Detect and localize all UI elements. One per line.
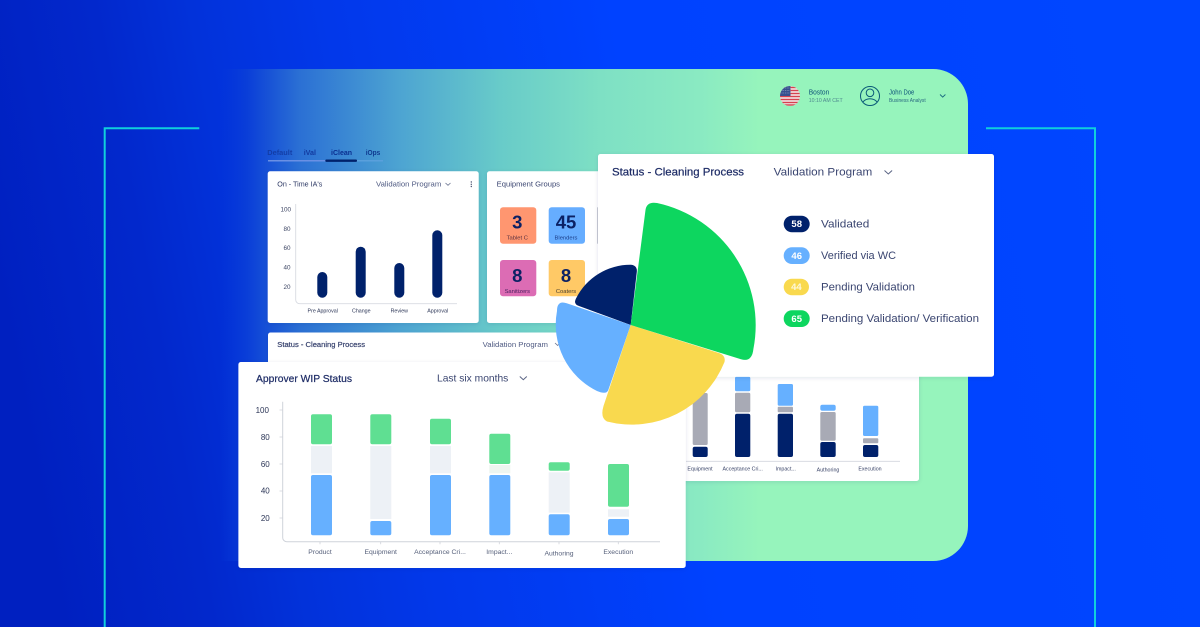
tabs: iClean — [331, 148, 352, 157]
legend: Verified via WC — [784, 247, 896, 264]
tabs: Default — [267, 148, 293, 157]
location text — [809, 89, 843, 104]
stacked bar chart: Product — [308, 549, 332, 556]
dropdown: Validation Program — [376, 179, 441, 188]
header: location and user — [780, 86, 945, 106]
bar chart: 40 — [283, 264, 291, 272]
frame accent: right corner — [986, 128, 1095, 627]
bar: Execution — [863, 406, 878, 457]
panel: Equipment Groups — [487, 171, 612, 323]
tile: Tablet C — [500, 207, 536, 244]
location text: Boston — [809, 89, 829, 96]
bar chart: Review — [391, 309, 408, 315]
legend: Pending Validation/ Verification: 65 — [791, 314, 803, 325]
tabs: iOps — [366, 148, 380, 157]
tabs — [267, 148, 383, 162]
tile: Sanitizers: 8 — [512, 265, 522, 286]
bar: Equipment — [693, 393, 708, 457]
legend: Pending Validation: Pending Validation — [821, 282, 915, 294]
slice: Pending Validation/ Verification — [631, 203, 756, 360]
heading: Status - Cleaning Process — [277, 340, 365, 349]
stacked bar chart: 80 — [261, 433, 270, 442]
legend: Validated: Validated — [821, 218, 869, 230]
bar chart: 60 — [283, 245, 291, 252]
stacked bar chart: Acceptance Cri... — [414, 549, 466, 556]
stacked bar chart — [686, 377, 900, 474]
frame accent: left corner — [105, 128, 199, 627]
tile: Tablet C: Tablet C — [507, 236, 528, 242]
stacked bar chart: Equipment — [687, 467, 713, 473]
panel: Status Cleaning Process stacked bars — [268, 332, 919, 481]
legend: Pending Validation/ Verification — [784, 310, 979, 327]
tile: Coaters — [549, 260, 585, 296]
panel: gradient dashboard backdrop — [220, 69, 968, 561]
tile: Coaters: Coaters — [556, 289, 576, 295]
heading: Equipment Groups — [497, 179, 560, 188]
stacked bar chart: Acceptance Cri... — [723, 467, 763, 473]
bar chart: 80 — [283, 226, 291, 233]
stacked bar chart: Authoring — [544, 550, 574, 558]
tile: Sanitizers — [500, 260, 536, 296]
bar chart: 100 — [280, 206, 291, 214]
legend: Validated: 58 — [791, 219, 802, 230]
tile: Sanitizers: Sanitizers — [505, 289, 530, 295]
bar: Acceptance — [430, 419, 451, 535]
stacked bar chart: Impact... — [486, 549, 512, 556]
panel: On-Time IAs — [268, 171, 479, 323]
bar chart — [280, 204, 457, 315]
bar chart: 20 — [283, 284, 291, 291]
stacked bar chart: 60 — [261, 460, 270, 469]
bar chart: Approval — [427, 309, 448, 315]
location text: 10:10 AM CET — [809, 98, 843, 104]
icon: user menu chevron — [940, 94, 945, 97]
tile: Coaters: 8 — [561, 265, 571, 286]
user text: Business Analyst — [889, 98, 926, 104]
bar: Authoring — [549, 462, 570, 535]
bar: Equipment — [370, 414, 391, 535]
legend: Pending Validation: 44 — [791, 282, 802, 293]
tile: Tablet C: 3 — [512, 212, 522, 232]
user text — [889, 89, 926, 104]
stacked bar chart: 40 — [261, 487, 270, 496]
icon: menu dots — [471, 181, 472, 187]
stacked bar chart: Execution — [858, 467, 882, 473]
bar chart: Pre Approval — [308, 309, 338, 315]
tabs: iVal — [304, 148, 316, 157]
legend: Verified via WC: 46 — [791, 251, 802, 262]
icon: US flag — [780, 86, 800, 106]
slice: Verified via WC — [556, 303, 631, 393]
stacked bar chart: Authoring — [817, 468, 839, 474]
stacked bar chart — [256, 402, 660, 558]
heading: Status - Cleaning Process — [612, 166, 745, 178]
dropdown: Validation Program — [774, 166, 872, 178]
bar: Product — [311, 414, 332, 535]
stacked bar chart: 20 — [261, 514, 270, 523]
stacked bar chart: Impact... — [776, 467, 796, 473]
bar chart: Change — [352, 309, 371, 315]
heading: On - Time IA's — [277, 179, 323, 188]
slice: Validated — [575, 265, 637, 325]
bar: Impact — [489, 434, 510, 535]
stacked bar chart: Equipment — [364, 549, 397, 556]
dropdown: Last six months — [437, 372, 508, 384]
icon: user — [860, 86, 880, 106]
legend: Pending Validation/ Verification: Pending Validation/ Verification — [821, 313, 979, 325]
user text: John Doe — [889, 89, 914, 96]
bar: Authoring — [820, 405, 836, 457]
panel: Status legend card — [598, 154, 994, 377]
stacked bar chart: Execution — [603, 549, 633, 556]
bar: Execution — [608, 464, 629, 535]
panel: Approver WIP Status — [238, 362, 686, 568]
legend: Verified via WC: Verified via WC — [821, 250, 896, 262]
bar: Acceptance — [735, 377, 750, 457]
tile: Blenders — [549, 207, 585, 244]
tile: Blenders: Blenders — [555, 236, 578, 242]
legend: Validated — [784, 216, 869, 232]
stacked bar chart: 100 — [256, 406, 270, 415]
heading: Approver WIP Status — [256, 373, 352, 385]
legend: Pending Validation — [784, 279, 915, 295]
dropdown: Validation Program — [483, 340, 548, 349]
pie chart — [556, 203, 756, 425]
tile: Blenders: 45 — [556, 212, 576, 232]
slice: Pending Validation — [602, 325, 725, 425]
bar: Impact — [778, 384, 793, 457]
